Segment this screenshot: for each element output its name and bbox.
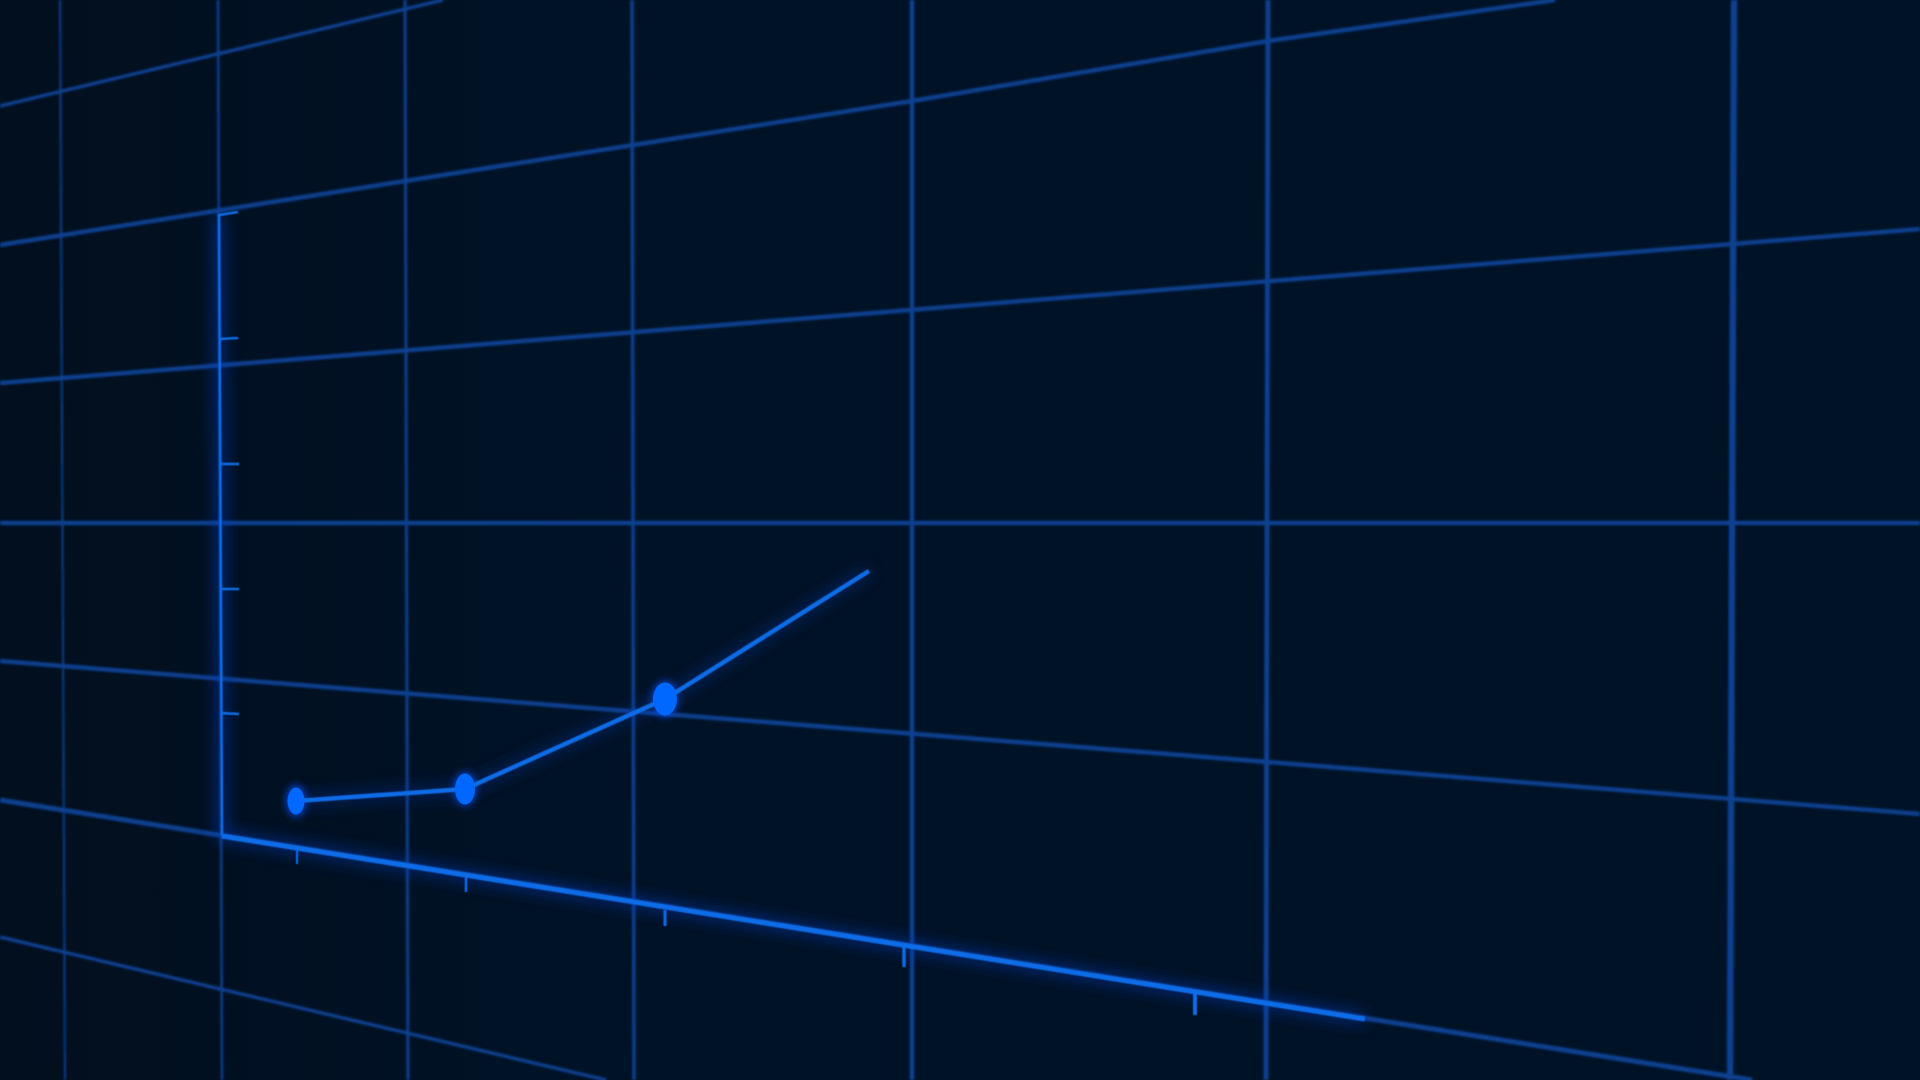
chart glow [219,215,1365,1019]
data points [288,682,677,814]
y axis with ticks [219,212,239,836]
data point glow [286,681,678,817]
x axis with ticks [222,836,1365,1019]
data line [296,571,869,801]
